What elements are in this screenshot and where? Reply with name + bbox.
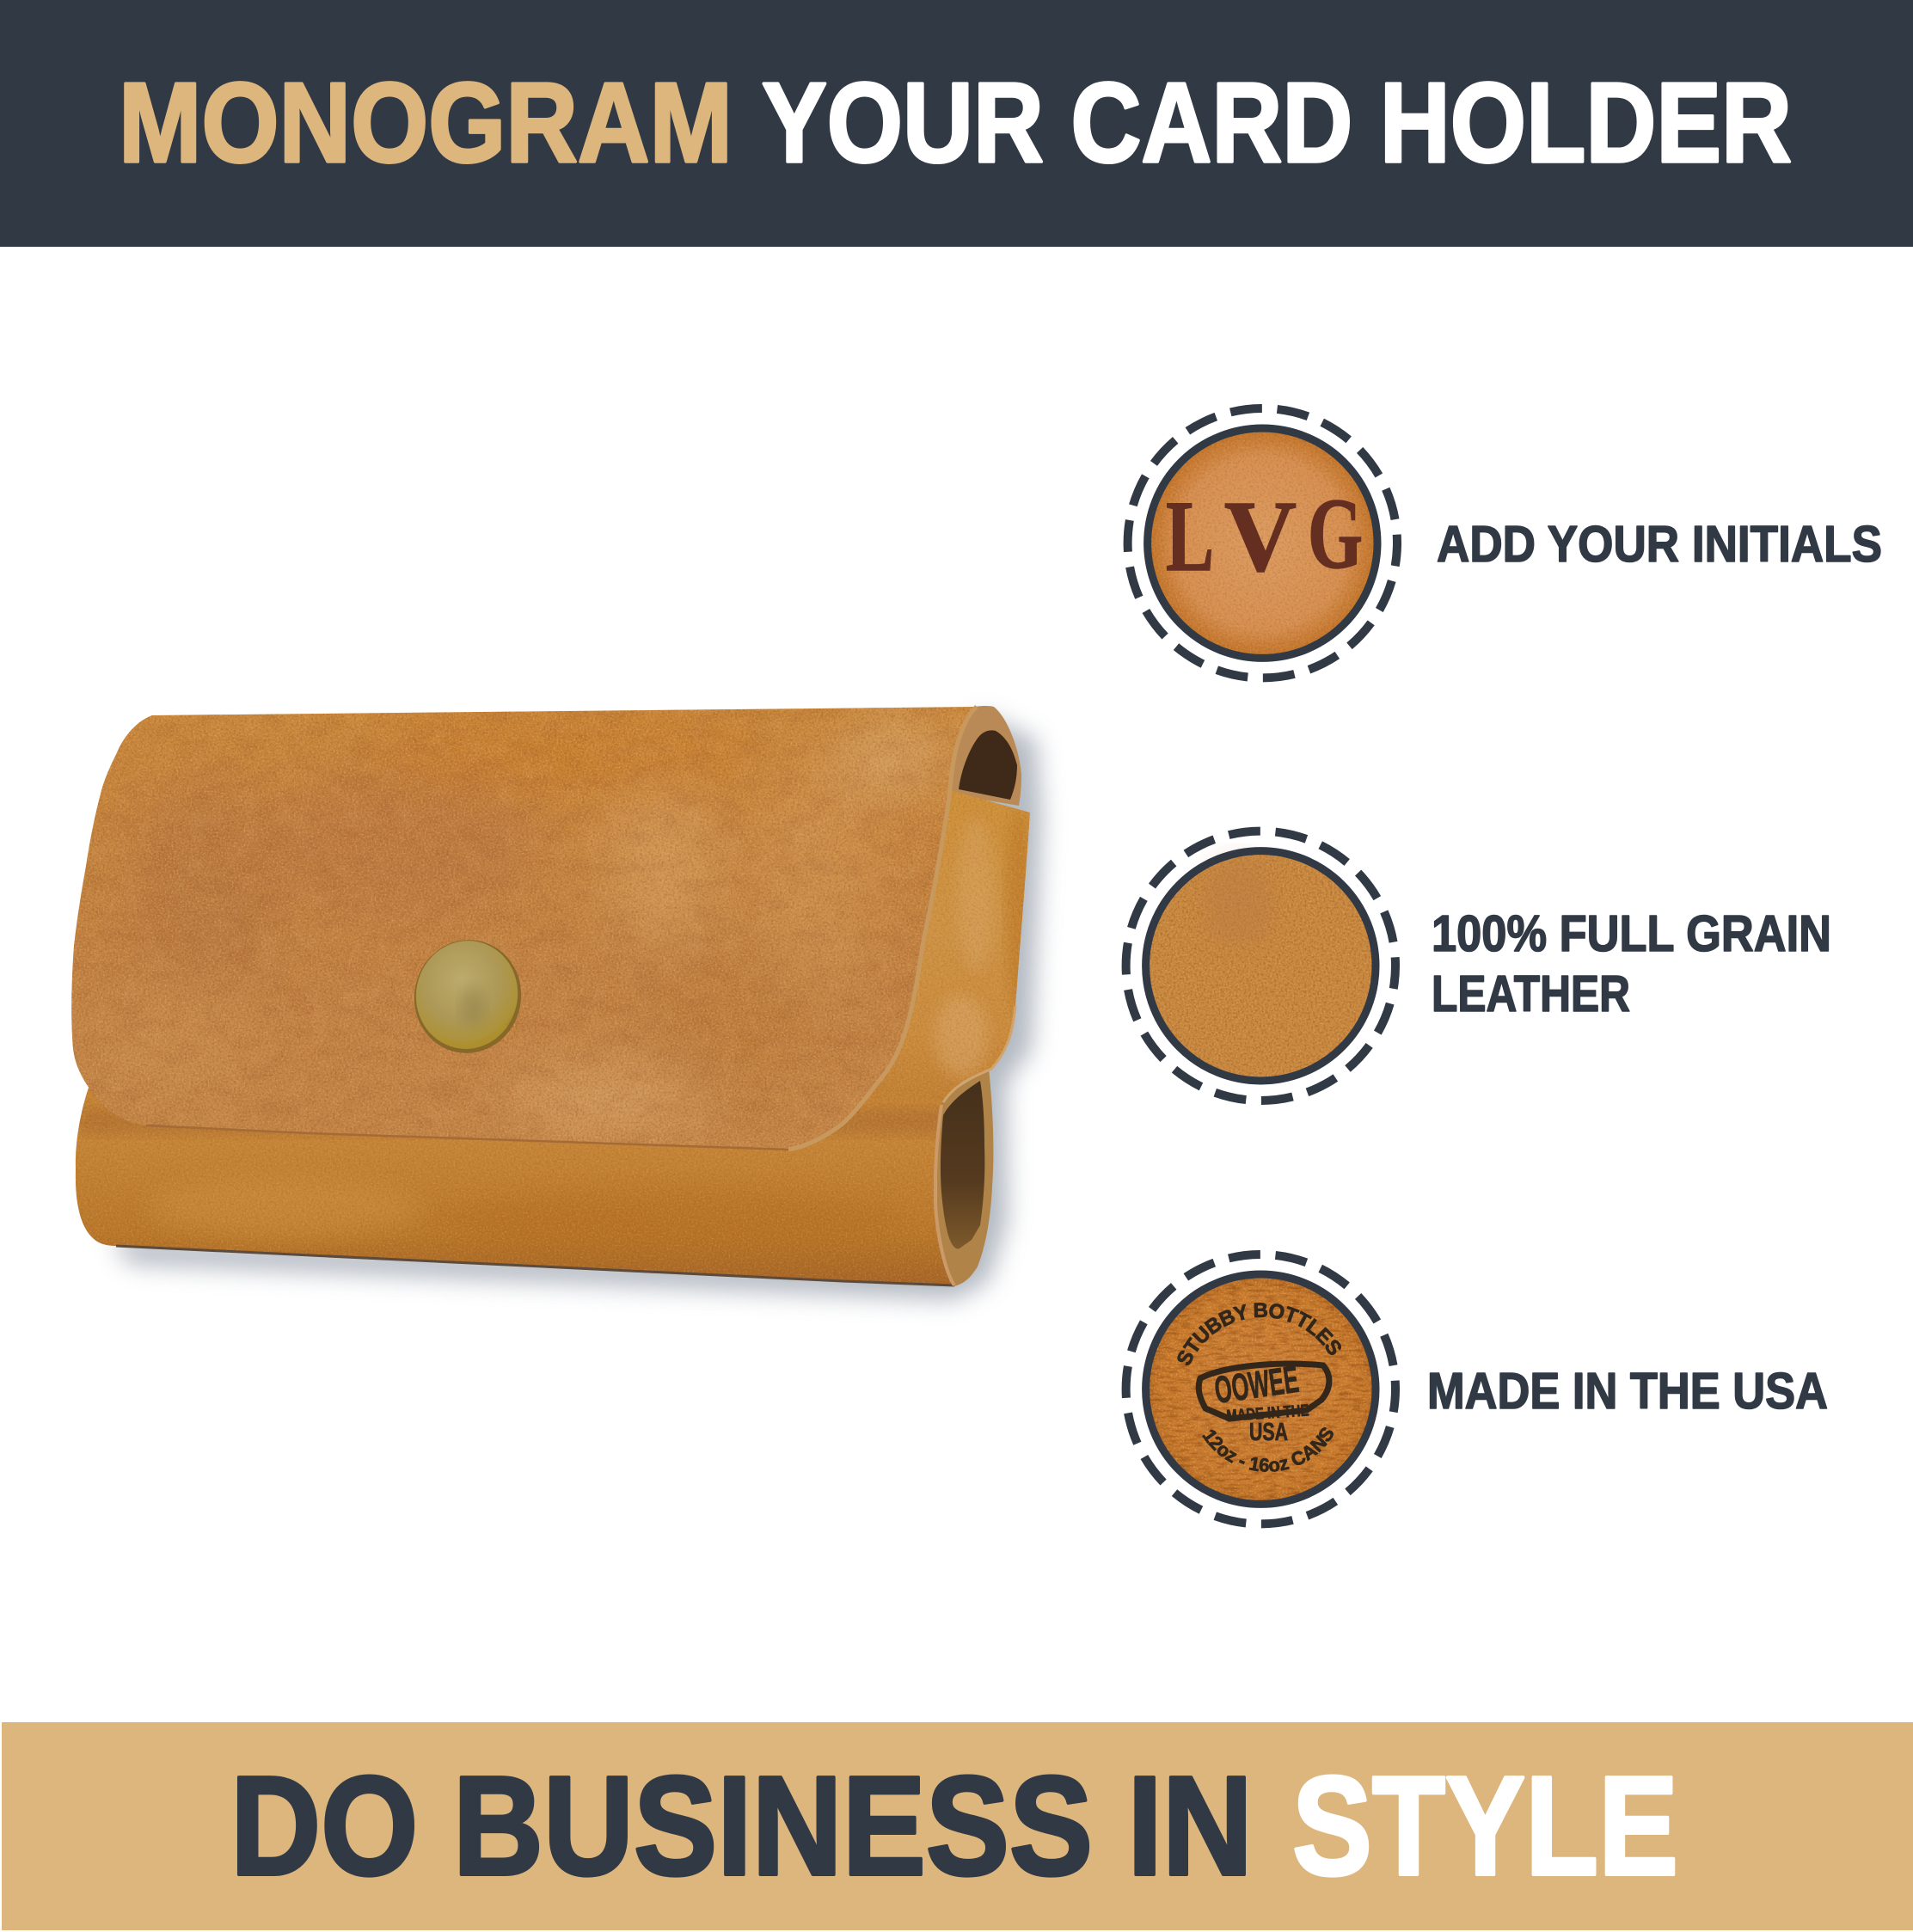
badge: full grain leather [1126, 831, 1395, 1101]
lower slot: rim and suede interior [937, 1069, 993, 1286]
stamped leather disc [1149, 1277, 1374, 1502]
label: made in the USA: MADE IN THE USA [1427, 1363, 1828, 1420]
upper slot: rim and suede interior [941, 706, 1021, 806]
title [119, 59, 1792, 186]
stamp text: 12oz - 16oz CANS: 12oz - 16oz CANS [1202, 1427, 1334, 1472]
stamp text: MADE IN THE: MADE IN THE [1226, 1401, 1309, 1426]
stamp mark [1177, 1303, 1341, 1472]
initial G: G [1308, 477, 1363, 590]
stamp text: OOWEE: OOWEE [1212, 1359, 1301, 1412]
leather disc [1150, 430, 1376, 655]
front flap [71, 707, 977, 1150]
slogan words: DO BUSINESS IN: DO BUSINESS IN [230, 1747, 1253, 1904]
solid inner ring [1146, 851, 1376, 1081]
stamp text: USA: USA [1249, 1419, 1288, 1446]
label: 100% full grain leather: LEATHER [1432, 966, 1630, 1022]
leather swatch [1149, 854, 1372, 1077]
product photo: leather card holder [71, 706, 1042, 1300]
label: 100% full grain leather [1432, 905, 1831, 1022]
initial L: L [1166, 480, 1214, 592]
slogan word: STYLE: STYLE [1292, 1747, 1678, 1904]
dashed outer ring [1128, 408, 1397, 678]
solid inner ring [1148, 428, 1377, 658]
holder body [76, 1086, 956, 1286]
badge: maker's stamp [1121, 1250, 1400, 1529]
dashed outer ring [1126, 1254, 1395, 1524]
label: 100% full grain leather: 100% FULL GRAIN [1432, 905, 1831, 962]
footer slogan [230, 1747, 1678, 1904]
initial V: V [1224, 480, 1297, 592]
side strap [892, 791, 1030, 1103]
header band [0, 0, 1913, 247]
badge: monogram initials [1128, 408, 1397, 678]
brass snap button [404, 930, 531, 1063]
solid inner ring [1146, 1274, 1376, 1504]
title word: MONOGRAM: MONOGRAM [119, 59, 733, 186]
stamp banner outline [1199, 1364, 1329, 1419]
dashed outer ring [1126, 831, 1395, 1101]
debossed initials LVG [1166, 477, 1363, 592]
stamp text: STUBBY BOTTLES: STUBBY BOTTLES [1177, 1303, 1341, 1365]
footer band [2, 1722, 1913, 1930]
soft drop shadow [112, 714, 1042, 1300]
